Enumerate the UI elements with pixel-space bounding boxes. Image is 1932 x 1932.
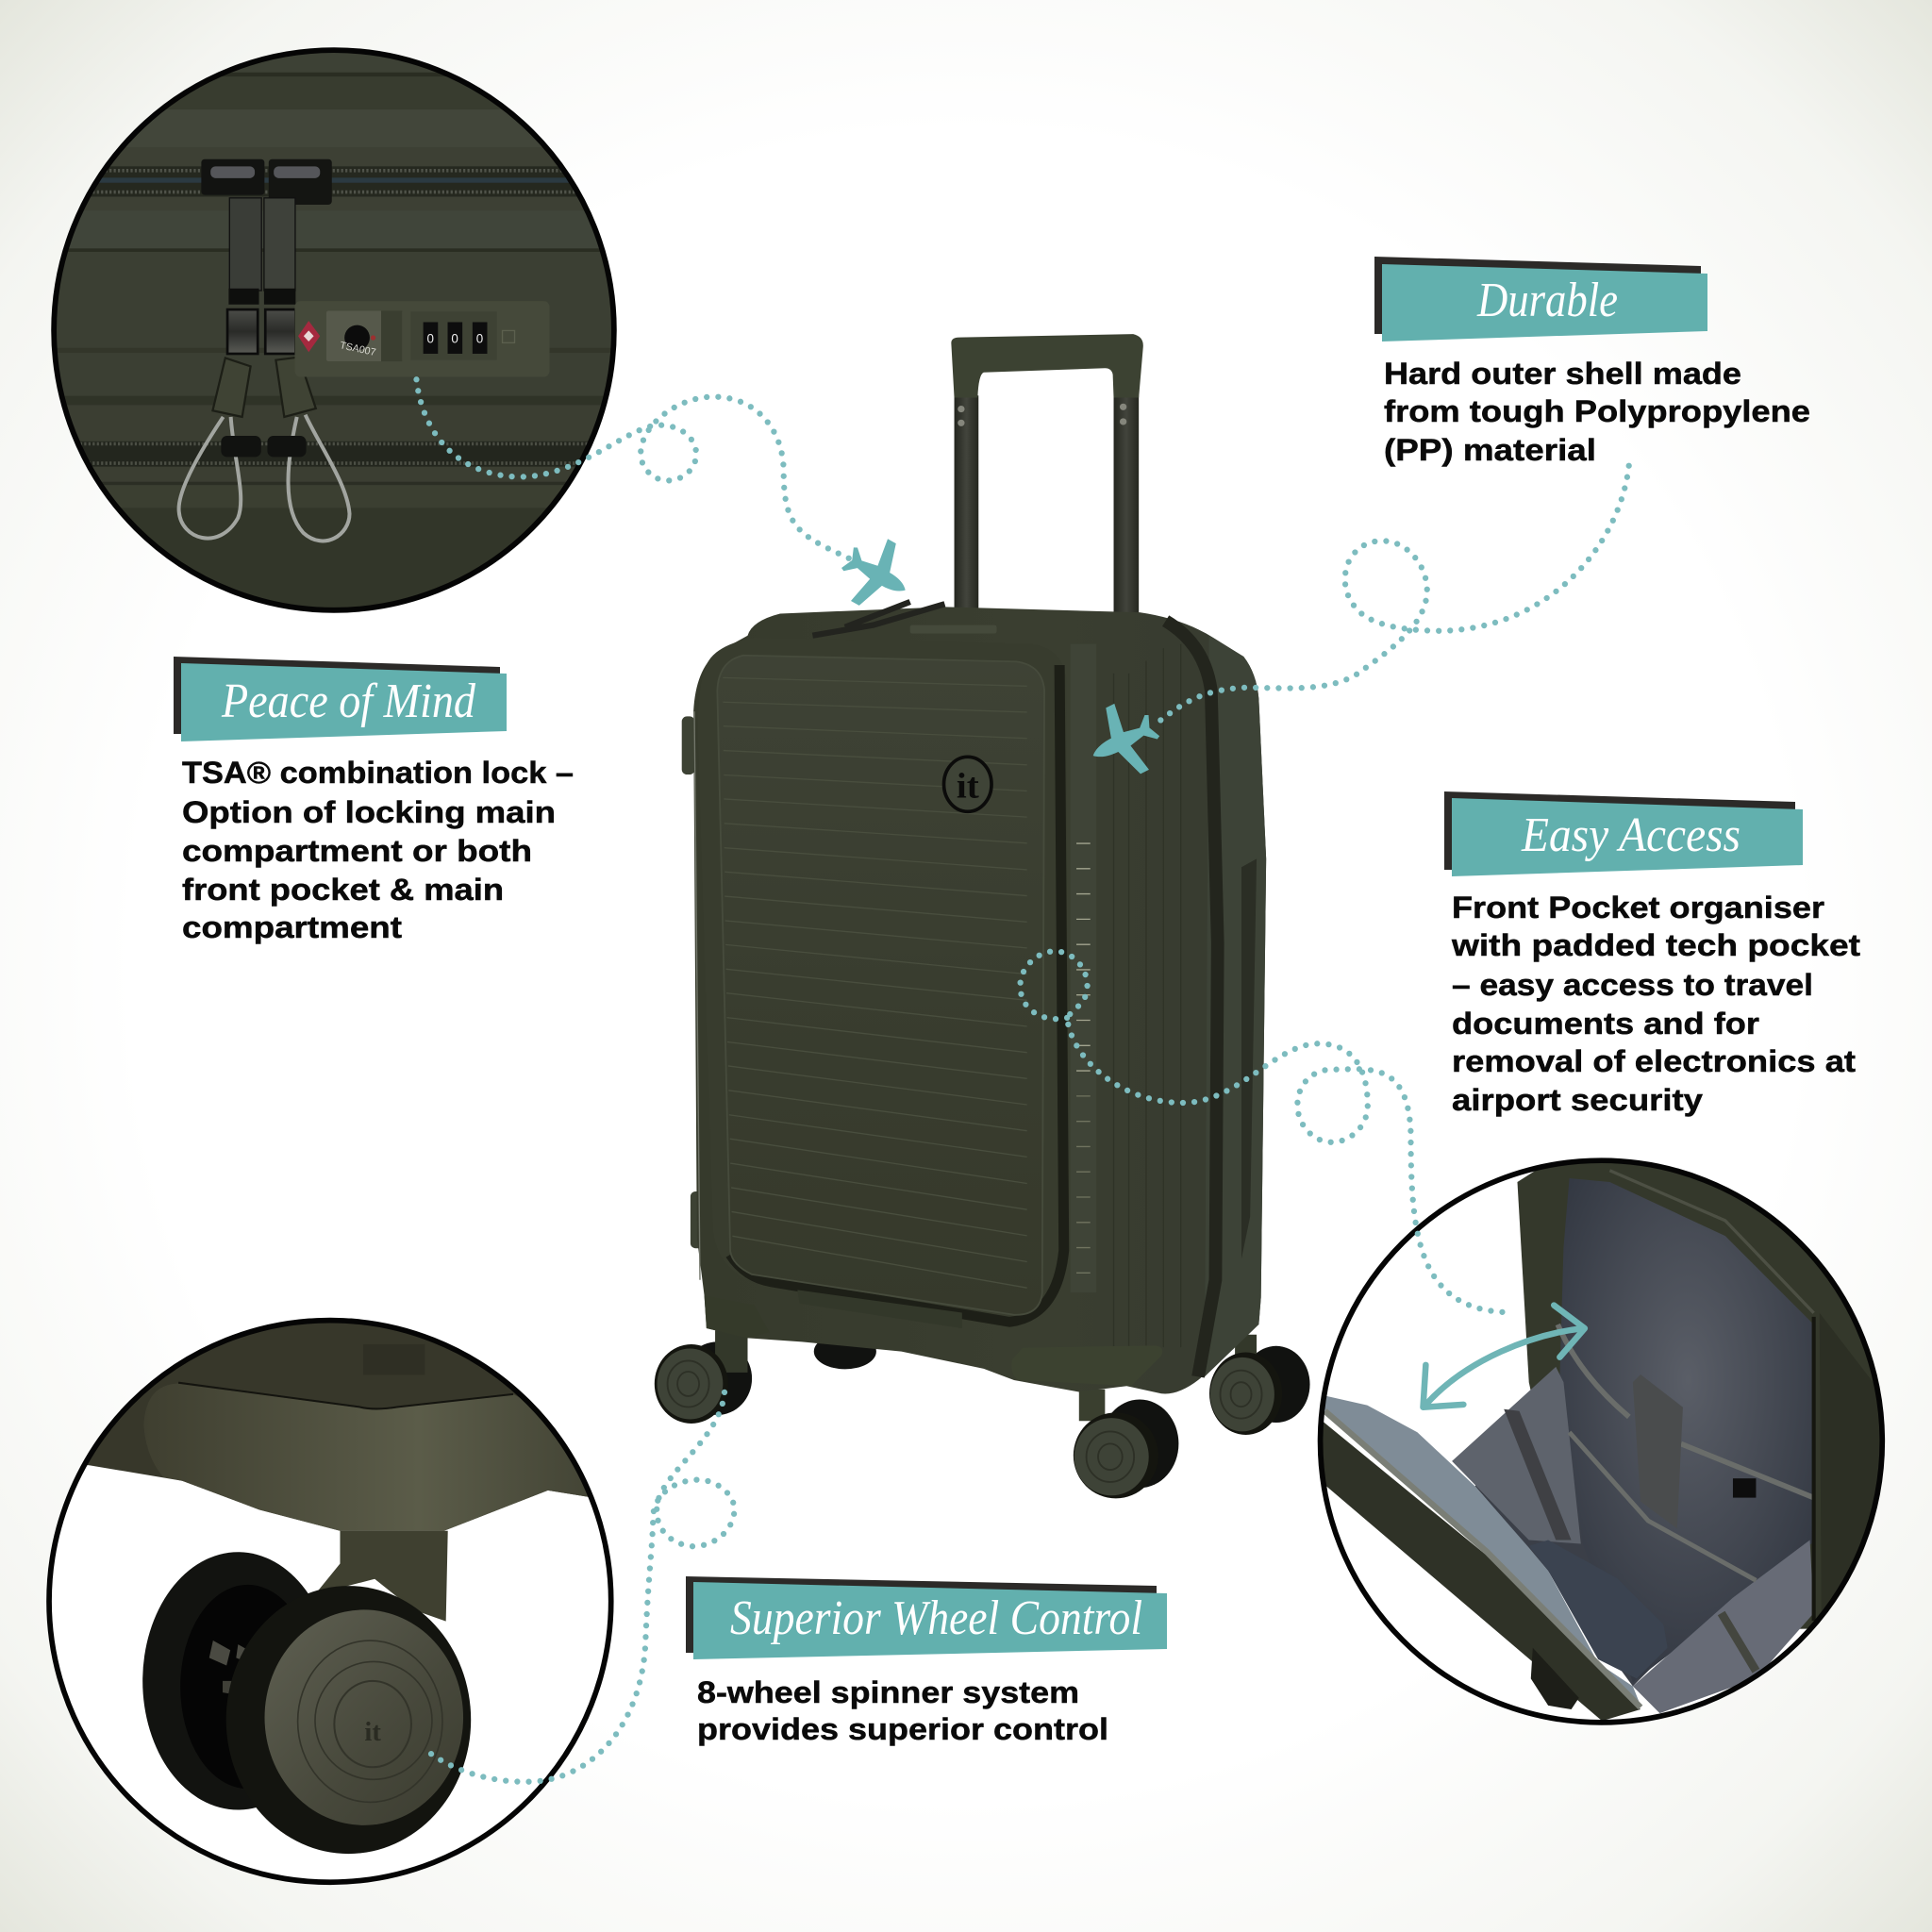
- suitcase: [655, 334, 1310, 1498]
- heading: Easy Access: [1444, 791, 1803, 876]
- TSA combination lock: [294, 301, 550, 377]
- ladder strip: [1071, 644, 1096, 1292]
- rear wheels: [683, 1330, 1310, 1488]
- heading: Peace of Mind: [174, 657, 507, 741]
- path: durable to plane: [1152, 466, 1629, 727]
- pocket grip bar: [797, 1290, 962, 1328]
- text: Easy Access description: airport security: [1452, 1083, 1703, 1117]
- TSA combination lock: 0: [476, 331, 483, 345]
- icon: plane on shell: [1075, 692, 1172, 789]
- zipper pulls and loops: [179, 159, 350, 541]
- TSA combination lock: 0: [426, 331, 434, 345]
- heading: Superior Wheel Control: Superior Wheel Control: [730, 1591, 1142, 1645]
- text: Superior Wheel Control description: provides superior control: [697, 1712, 1108, 1746]
- text: Peace of Mind description: compartment: [182, 910, 402, 944]
- text: Durable description: [1384, 357, 1810, 467]
- text: Durable description: from tough Polypropylene: [1384, 394, 1810, 428]
- front panel frame: [698, 638, 1068, 1326]
- path: wheel to close-up: [429, 1392, 734, 1782]
- text: Easy Access description: – easy access to travel: [1452, 968, 1813, 1002]
- heading: Peace of Mind: Peace of Mind: [221, 675, 476, 728]
- horizontal ribs: [723, 677, 1027, 1288]
- text: Superior Wheel Control description: 8-wheel spinner system: [697, 1675, 1079, 1709]
- main zipper: [1166, 621, 1218, 1376]
- heading: Durable: [1374, 257, 1707, 341]
- back shell section: [1205, 636, 1266, 1376]
- dotted flight paths: [416, 379, 1629, 1782]
- side feet: [682, 716, 694, 774]
- text: Easy Access description: documents and for: [1452, 1007, 1759, 1041]
- TSA combination lock: TSA007: [339, 340, 376, 358]
- panel: lock close-up circle: [42, 42, 632, 619]
- side ribs: [1114, 644, 1181, 1347]
- heading: Durable: Durable: [1476, 274, 1618, 327]
- icon: plane by handle: [829, 526, 924, 621]
- suitcase shell: [693, 607, 1266, 1393]
- telescopic handle: [951, 334, 1143, 614]
- text: Peace of Mind description: [182, 756, 574, 944]
- path: pocket to close-up: [1020, 951, 1506, 1312]
- heading: Easy Access: Easy Access: [1521, 808, 1740, 862]
- text: Easy Access description: [1451, 891, 1860, 1117]
- TSA combination lock: 0: [451, 331, 458, 345]
- panel: wheel close-up circle: it: [364, 1718, 381, 1747]
- text: Peace of Mind description: TSA® combination lock –: [182, 756, 574, 790]
- text: Easy Access description: Front Pocket organiser: [1452, 891, 1824, 924]
- bumpers: [705, 1295, 769, 1338]
- icon: double-headed arrow: [1424, 1306, 1585, 1407]
- text: Durable description: (PP) material: [1384, 433, 1596, 467]
- front pocket panel: [717, 656, 1044, 1315]
- zipper pulls on top: [812, 602, 944, 636]
- it logo: [944, 757, 991, 811]
- path: lock to plane: [416, 379, 854, 560]
- text: Superior Wheel Control description: [697, 1675, 1108, 1746]
- text: Easy Access description: with padded tech pocket: [1451, 928, 1860, 962]
- panel: front pocket close-up circle: [1317, 1158, 1885, 1725]
- front wheels: [655, 1344, 1282, 1498]
- it logo: it: [957, 767, 979, 806]
- text: Easy Access description: removal of electronics at: [1452, 1044, 1856, 1078]
- text: Durable description: Hard outer shell made: [1384, 357, 1741, 391]
- pocket zip: [730, 665, 1064, 1322]
- heading: Superior Wheel Control: [686, 1576, 1167, 1659]
- text: Peace of Mind description: front pocket & main: [182, 873, 504, 907]
- text: Peace of Mind description: compartment or both: [182, 834, 532, 868]
- panel: wheel close-up circle: [46, 1317, 614, 1885]
- text: Peace of Mind description: Option of locking main: [182, 795, 556, 829]
